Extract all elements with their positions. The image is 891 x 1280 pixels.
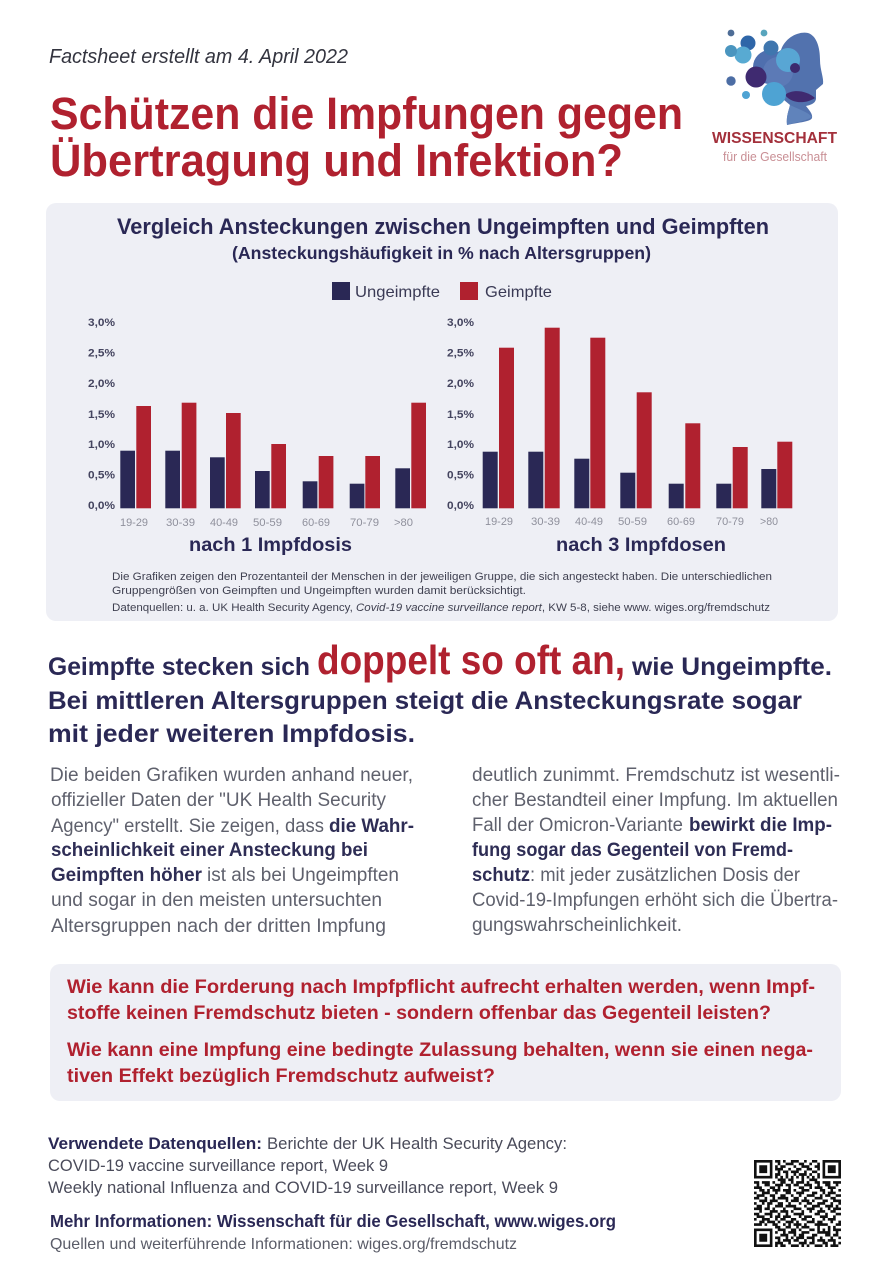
bar chart: after 1 dose: 0,5% <box>88 470 115 482</box>
bar chart: after 3 doses: 3,0% <box>447 317 474 329</box>
bar chart: after 3 doses: >80 <box>760 516 778 528</box>
body text: right column: cher Bestandteil einer Impfung. Im aktuellen <box>472 790 838 811</box>
body text: left column: scheinlichkeit einer Ansteckung bei <box>51 840 368 861</box>
body text: right column: deutlich zunimmt. Fremdschutz ist wesentli- <box>472 765 840 786</box>
chart notes and sources: Die Grafiken zeigen den Prozentanteil der Menschen in der jeweiligen Gruppe, die sich angesteckt haben. Die unterschiedlichen <box>112 571 772 583</box>
body text: right column: fung sogar das Gegenteil von Fremd- <box>472 840 793 861</box>
key message headline <box>48 637 832 748</box>
question 2: tiven Effekt bezüglich Fremdschutz aufweist? <box>67 1066 495 1087</box>
bar chart: after 1 dose: 50-59 <box>253 517 282 529</box>
bar chart: after 1 dose: 40-49 <box>210 517 238 529</box>
data sources: Weekly national Influenza and COVID-19 surveillance report, Week 9 <box>48 1178 558 1197</box>
bar chart: after 1 dose: 2,5% <box>88 348 115 360</box>
bar chart: after 3 doses: 2,0% <box>447 378 474 390</box>
bar chart: after 1 dose <box>88 317 426 556</box>
question 1: stoffe keinen Fremdschutz bieten - sondern offenbar das Gegenteil leisten? <box>67 1003 771 1024</box>
legend: Geimpfte <box>485 284 552 301</box>
key message headline: mit jeder weiteren Impfdosis. <box>48 720 415 748</box>
bar chart: after 1 dose: >80 <box>394 517 413 529</box>
data sources: Verwendete Datenquellen: <box>48 1134 262 1153</box>
body text: left column: die Wahr- <box>329 816 414 837</box>
title: Übertragung und Infektion? <box>50 135 623 186</box>
bar chart: after 3 doses: nach 3 Impfdosen <box>556 535 726 556</box>
bar chart: after 1 dose: 0,0% <box>88 500 115 512</box>
bar chart: after 1 dose: 1,5% <box>88 409 115 421</box>
body text: right column: bewirkt die Imp- <box>689 815 832 836</box>
body text: left column: Die beiden Grafiken wurden anhand neuer, <box>50 765 413 786</box>
legend: Ungeimpfte <box>355 284 440 301</box>
logo subtitle: für die Gesellschaft <box>723 150 828 164</box>
question 1 <box>67 977 815 1024</box>
more information: Mehr Informationen: Wissenschaft für die Gesellschaft, www.wiges.org <box>50 1211 616 1231</box>
bar chart: after 3 doses: 2,5% <box>447 348 474 360</box>
bar chart: after 3 doses: 40-49 <box>575 516 603 528</box>
chart notes and sources: Gruppengrößen von Geimpften und Ungeimpften wurden damit berücksichtigt. <box>112 585 526 597</box>
more information <box>50 1211 616 1253</box>
bar chart: after 1 dose: 1,0% <box>88 439 115 451</box>
body text: left column: Agency" erstellt. Sie zeigen, dass <box>51 816 324 837</box>
key message headline: doppelt so oft an, <box>317 637 625 683</box>
body text: right column: Covid-19-Impfungen erhöht sich die Übertra- <box>472 890 838 911</box>
question 2 <box>67 1040 813 1087</box>
body text: left column: Altersgruppen nach der dritten Impfung <box>51 916 386 937</box>
panel: vaccination comparison charts <box>46 203 838 621</box>
data sources: Berichte der UK Health Security Agency: <box>267 1134 567 1153</box>
bar chart: after 3 doses: 19-29 <box>485 516 513 528</box>
bar chart: after 1 dose: nach 1 Impfdosis <box>189 535 352 556</box>
body text: left column: Geimpften höher <box>51 865 203 886</box>
body text: right column <box>472 765 840 936</box>
bar chart: after 1 dose: 19-29 <box>120 517 148 529</box>
bar chart: after 3 doses: 50-59 <box>618 516 647 528</box>
chart notes and sources: Datenquellen: u. a. UK Health Security Agency, Covid-19 vaccine surveillance report , KW 5-8, siehe www. wiges.org/fremdschutz <box>112 602 770 614</box>
key message headline: wie Ungeimpfte. <box>631 653 832 681</box>
body text: left column: ist als bei Ungeimpften <box>207 865 399 886</box>
bar chart: after 3 doses: 60-69 <box>667 516 695 528</box>
question 1: Wie kann die Forderung nach Impfpflicht aufrecht erhalten werden, wenn Impf- <box>67 977 815 998</box>
logo wordmark: WISSENSCHAFT <box>712 130 837 147</box>
body text: left column: offizieller Daten der "UK Health Security <box>51 790 386 811</box>
icon: QR code <box>754 1160 841 1247</box>
bar chart: after 3 doses: 70-79 <box>716 516 744 528</box>
body text: left column <box>50 765 414 937</box>
bar chart: after 1 dose: 60-69 <box>302 517 330 529</box>
chart heading: Vergleich Ansteckungen zwischen Ungeimpften und Geimpften <box>117 214 769 239</box>
body text: right column: schutz <box>472 865 530 886</box>
more information: Quellen und weiterführende Informationen: wiges.org/fremdschutz <box>50 1236 517 1253</box>
body text: left column: und sogar in den meisten untersuchten <box>51 890 382 911</box>
legend <box>332 282 552 301</box>
body text: right column: Fall der Omicron-Variante <box>472 815 683 836</box>
key message headline: Geimpfte stecken sich <box>48 653 310 681</box>
title <box>50 88 683 186</box>
bar chart: after 3 doses: 0,0% <box>447 500 474 512</box>
bar chart: after 3 doses: 1,0% <box>447 439 474 451</box>
bar chart: after 3 doses: 0,5% <box>447 470 474 482</box>
chart notes and sources <box>112 571 772 614</box>
question 2: Wie kann eine Impfung eine bedingte Zulassung behalten, wenn sie einen nega- <box>67 1040 813 1061</box>
bar chart: after 1 dose: 70-79 <box>350 517 379 529</box>
body text: right column: : mit jeder zusätzlichen Dosis der <box>530 865 801 886</box>
chart subheading: (Ansteckungshäufigkeit in % nach Altersgruppen) <box>232 243 651 263</box>
logo: Wissenschaft für die Gesellschaft <box>712 30 837 164</box>
title: Schützen die Impfungen gegen <box>50 88 683 139</box>
bar chart: after 3 doses: 1,5% <box>447 409 474 421</box>
callout: questions <box>50 964 841 1101</box>
icon: head with circles <box>725 30 823 125</box>
bar chart: after 1 dose: 2,0% <box>88 378 115 390</box>
data sources: COVID-19 vaccine surveillance report, Week 9 <box>48 1156 388 1175</box>
data sources <box>48 1134 567 1197</box>
body text: right column: gungswahrscheinlichkeit. <box>472 915 682 936</box>
bar chart: after 3 doses: 30-39 <box>531 516 560 528</box>
date line: Factsheet erstellt am 4. April 2022 <box>49 46 348 68</box>
key message headline: Bei mittleren Altersgruppen steigt die Ansteckungsrate sogar <box>48 687 802 715</box>
bar chart: after 1 dose: 3,0% <box>88 317 115 329</box>
bar chart: after 1 dose: 30-39 <box>166 517 195 529</box>
bar chart: after 3 doses <box>447 317 792 556</box>
